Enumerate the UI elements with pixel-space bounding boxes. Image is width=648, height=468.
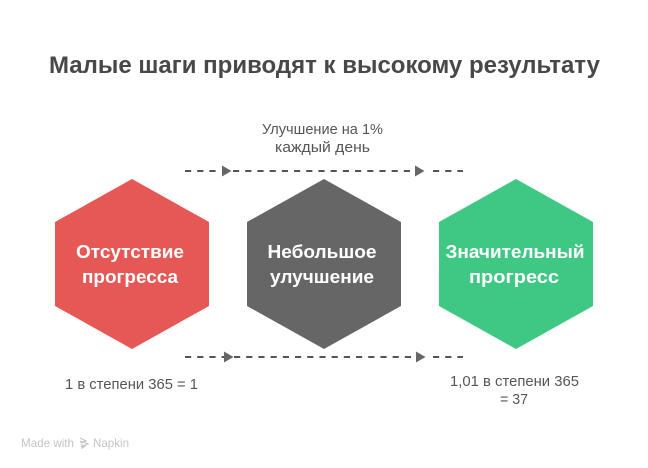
top caption [262, 122, 383, 156]
hexagon: no progress: Отсутствие [76, 241, 184, 262]
bottom dashed arrow line [185, 352, 463, 362]
top caption: Улучшение на 1% [262, 122, 383, 138]
right caption: 1,01 в степени 365 [450, 374, 579, 390]
watermark: Napkin [93, 436, 129, 450]
hexagon: no progress: прогресса [82, 266, 179, 287]
icon: napkin logo [80, 438, 88, 448]
hexagon: small improvement: улучшение [270, 266, 374, 287]
right caption [450, 374, 579, 408]
hexagon: significant progress: Значительный [446, 241, 584, 262]
top dashed arrow line [185, 166, 463, 176]
watermark [21, 436, 129, 450]
hexagon: significant progress: прогресс [469, 266, 559, 287]
title: Малые шаги приводят к высокому результату [49, 52, 600, 79]
hexagon: small improvement [247, 179, 401, 349]
top caption: каждый день [275, 140, 370, 156]
right caption: = 37 [500, 392, 528, 408]
hexagon: small improvement: Небольшое [268, 241, 376, 262]
hexagon: significant progress [439, 179, 593, 349]
left caption: 1 в степени 365 = 1 [65, 377, 198, 393]
watermark: Made with [21, 436, 74, 450]
hexagon: no progress [55, 179, 209, 349]
